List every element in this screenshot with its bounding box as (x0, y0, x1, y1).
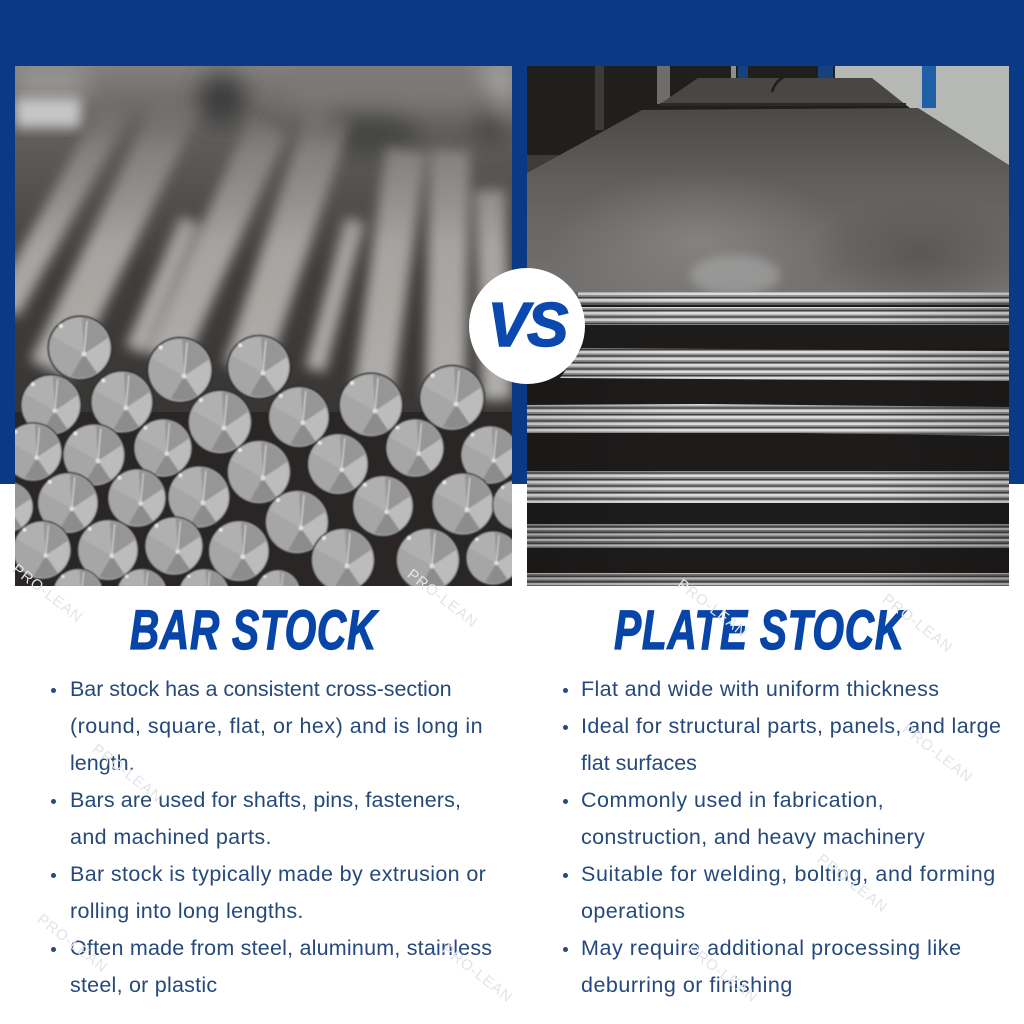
list: bar stock points: Often made from steel, aluminum, stainless (70, 936, 492, 960)
heading: plate stock: PLATE STOCK (614, 598, 904, 661)
pale wall (835, 66, 1009, 170)
list: plate stock points: Flat and wide with uniform thickness (581, 677, 939, 701)
white highlight (15, 98, 81, 128)
watermarks: PRO-LEAN (439, 941, 516, 1006)
watermarks: PRO-LEAN (814, 851, 891, 916)
VS badge: VS (488, 291, 566, 360)
blue header background (0, 0, 1024, 484)
watermarks: PRO-LEAN (879, 591, 956, 656)
list: bar stock points: (round, square, flat, or hex) and is long in (70, 714, 483, 738)
list: bar stock points: length. (70, 751, 135, 775)
list: plate stock points: deburring or finishing (581, 973, 793, 997)
list: plate stock points: May require additional processing like (581, 936, 962, 960)
list: bar stock points: Bars are used for shafts, pins, fasteners, (70, 788, 461, 812)
watermarks: PRO-LEAN (899, 721, 976, 786)
bar end faces (0, 316, 544, 620)
list: plate stock points: construction, and heavy machinery (581, 825, 925, 849)
list: plate stock points: Ideal for structural parts, panels, and large (581, 714, 1001, 738)
watermarks: PRO-LEAN (9, 561, 86, 626)
main plate surface (527, 108, 1009, 293)
watermarks: PRO-LEAN (674, 576, 751, 641)
poles (595, 66, 604, 130)
list: plate stock points (563, 677, 1001, 997)
watermarks: PRO-LEAN (684, 941, 761, 1006)
list: bar stock points: Bar stock is typically made by extrusion or (70, 862, 486, 886)
photo: stacked steel plates (527, 66, 1009, 586)
list: plate stock points: Commonly used in fabrication, (581, 788, 884, 812)
list: plate stock points: flat surfaces (581, 751, 697, 775)
list: bar stock points: rolling into long lengths. (70, 899, 304, 923)
background blurred tones (15, 66, 512, 157)
list: bar stock points: Bar stock has a consistent cross-section (70, 677, 452, 701)
watermarks: PRO-LEAN (89, 741, 166, 806)
blue post (922, 66, 936, 108)
watermarks: PRO-LEAN (404, 566, 481, 631)
rods (5, 100, 497, 400)
plate edge bands (578, 292, 1009, 305)
list: bar stock points: and machined parts. (70, 825, 272, 849)
photo: steel round bars (15, 66, 512, 586)
dark warehouse background (527, 66, 1009, 296)
upper plate (660, 78, 906, 105)
watermarks: PRO-LEAN (34, 911, 111, 976)
list: bar stock points: steel, or plastic (70, 973, 217, 997)
dark packed gap between bars (15, 412, 512, 586)
VS badge (469, 268, 585, 384)
heading: bar stock: BAR STOCK (130, 598, 377, 661)
dark stack side (527, 292, 1009, 586)
list: bar stock points (51, 677, 492, 997)
list: plate stock points: operations (581, 899, 685, 923)
list: plate stock points: Suitable for welding, bolting, and forming (581, 862, 996, 886)
